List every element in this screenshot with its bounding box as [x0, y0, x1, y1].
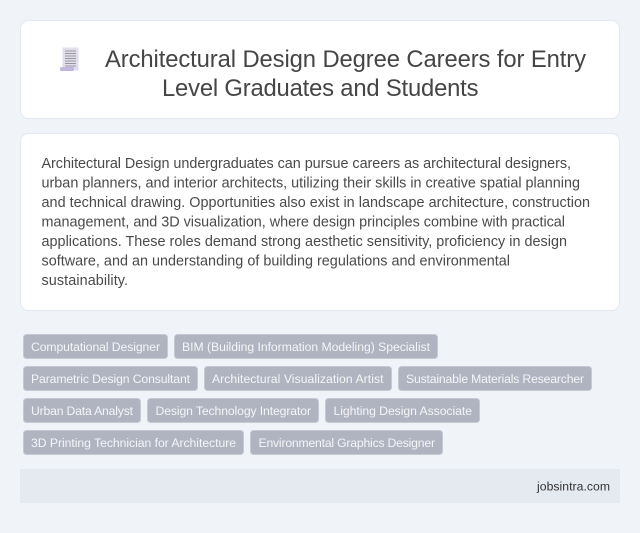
tag: Parametric Design Consultant: Parametric Design Consultant: [31, 372, 191, 386]
tag: 3D Printing Technician for Architecture: [24, 430, 244, 454]
tag: Urban Data Analyst: [24, 398, 140, 422]
tag: Architectural Visualization Artist: [204, 366, 392, 390]
title: [105, 46, 586, 102]
description text: [42, 156, 590, 289]
tag: Environmental Graphics Designer: Environmental Graphics Designer: [258, 436, 435, 450]
description text: sustainability.: [42, 273, 128, 289]
tag: Architectural Visualization Artist: Architectural Visualization Artist: [212, 372, 384, 386]
icon: document scroll: [60, 48, 78, 71]
tag: Urban Data Analyst: Urban Data Analyst: [31, 404, 134, 418]
description text: urban planners, and interior architects, utilizing their skills in creative spatial planning: [42, 176, 580, 192]
tag: Environmental Graphics Designer: [250, 430, 442, 454]
tag: Sustainable Materials Researcher: [398, 366, 592, 390]
description text: Architectural Design undergraduates can pursue careers as architectural designers,: [42, 156, 571, 172]
tag: Design Technology Integrator: [148, 398, 318, 422]
tag: Sustainable Materials Researcher: Sustainable Materials Researcher: [406, 372, 584, 386]
tag: Parametric Design Consultant: [24, 366, 198, 390]
title: Architectural Design Degree Careers for Entry: [105, 46, 586, 73]
footer bar: [20, 469, 620, 503]
tag: 3D Printing Technician for Architecture: 3D Printing Technician for Architecture: [31, 436, 236, 450]
career tags: [24, 334, 592, 454]
tag: Computational Designer: [24, 334, 168, 358]
description text: applications. These roles demand strong aesthetic sensitivity, proficiency in design: [42, 234, 567, 250]
footer source text: jobsintra.com: [536, 480, 610, 494]
panel: header card: [20, 20, 620, 118]
tag: Computational Designer: Computational Designer: [31, 340, 160, 354]
description text: software, and an understanding of building regulations and environmental: [42, 254, 510, 270]
panel: description card: [20, 134, 620, 310]
tag: Lighting Design Associate: [326, 398, 480, 422]
tag: Design Technology Integrator: Design Technology Integrator: [156, 404, 311, 418]
title: Level Graduates and Students: [162, 75, 479, 102]
description text: and technical drawing. Opportunities also exist in landscape architecture, construction: [42, 195, 590, 211]
tag: BIM Specialist: [174, 334, 438, 358]
description text: management, and 3D visualization, where design principles combine with practical: [42, 214, 565, 230]
tag: Lighting Design Associate: Lighting Design Associate: [334, 404, 472, 418]
tag: BIM Specialist: BIM (Building Information Modeling) Specialist: [182, 340, 431, 354]
